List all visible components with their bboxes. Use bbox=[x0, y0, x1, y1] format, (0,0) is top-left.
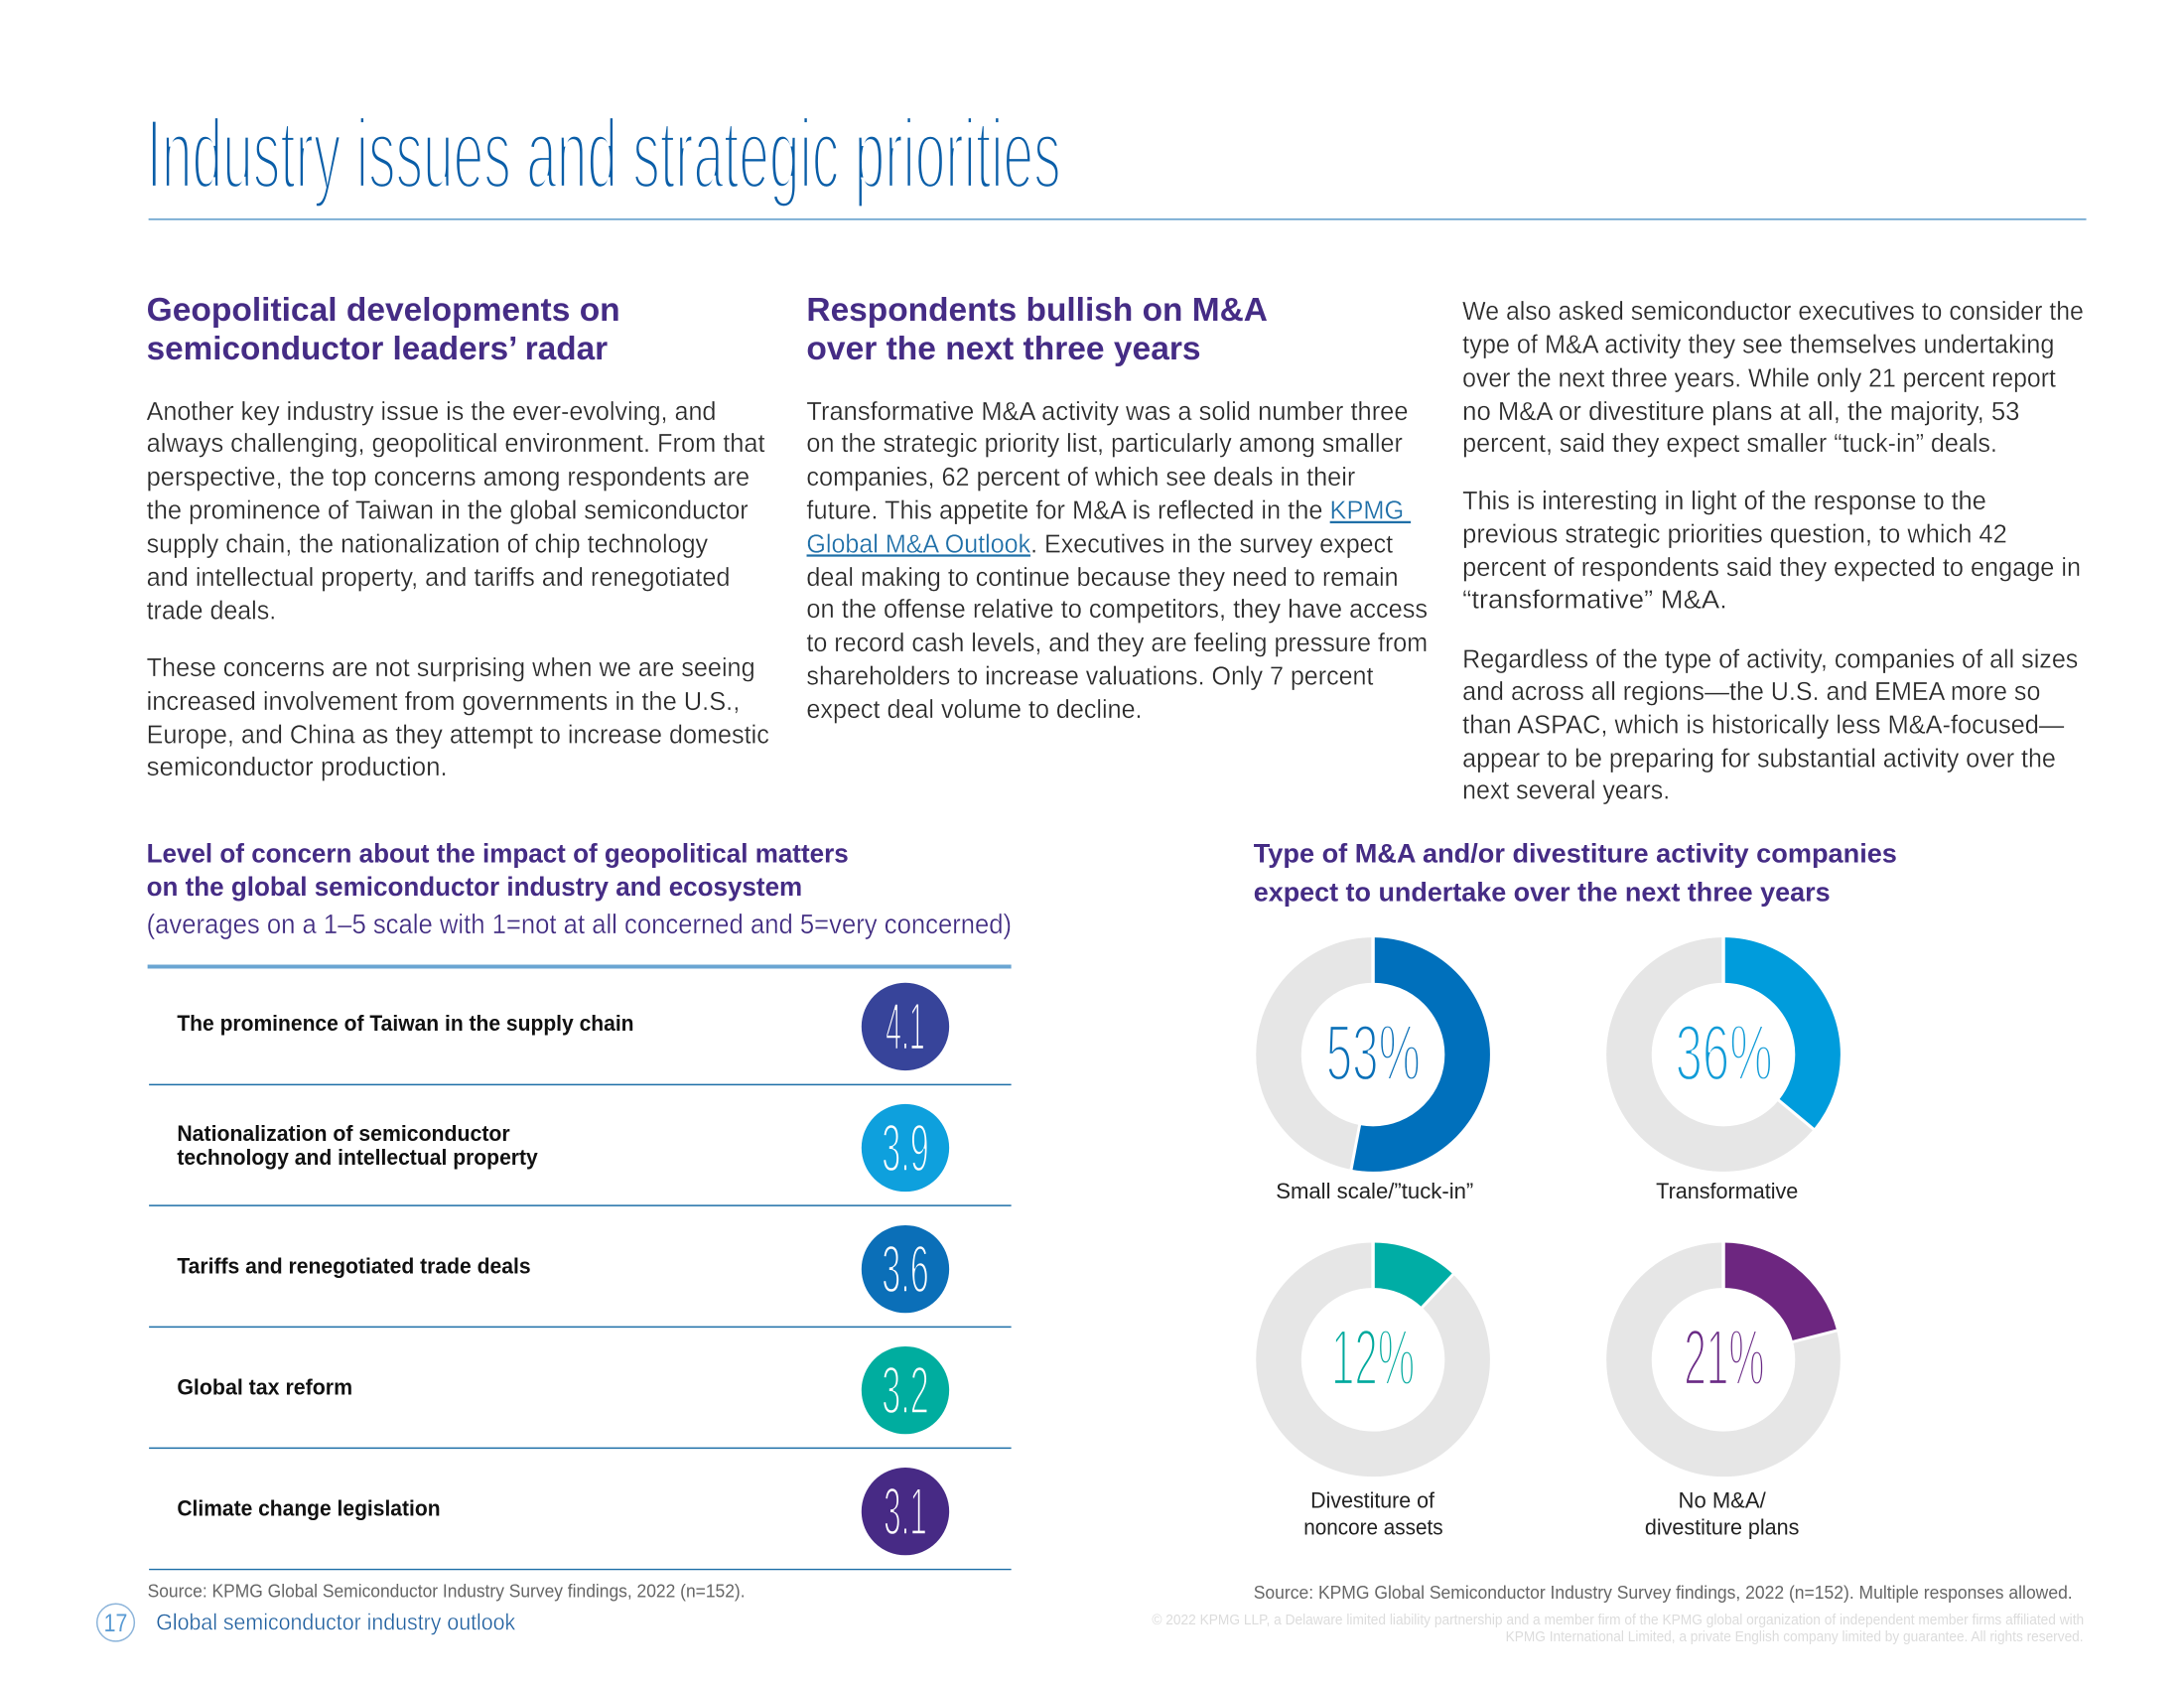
chart heading: level of concern: on the global semiconductor industry and ecosystem bbox=[147, 872, 802, 902]
text column: type of M&A activity: percent, said they expect smaller “tuck-in” deals. bbox=[1462, 430, 1997, 458]
panel: type of M&A activity bbox=[1254, 839, 2073, 1603]
heading: bullish on M&A: over the next three years bbox=[806, 331, 1201, 367]
heading: bullish on M&A bbox=[806, 292, 1268, 367]
donut: 12 percent divestiture: 12% bbox=[1331, 1312, 1415, 1401]
text column: type of M&A activity: This is interesting in light of the response to the bbox=[1462, 488, 1986, 515]
body text: geopolitical paragraphs: Europe, and China as they attempt to increase domestic bbox=[147, 721, 769, 749]
row: tariffs 3.6 bbox=[177, 1225, 949, 1313]
body text: M&A paragraph: deal making to continue because they need to remain bbox=[806, 564, 1399, 592]
body text: M&A paragraph: shareholders to increase valuations. Only 7 percent bbox=[806, 663, 1373, 691]
row: climate 3.1: Climate change legislation bbox=[177, 1495, 441, 1520]
donut: 12 percent divestiture: Divestiture of bbox=[1310, 1488, 1435, 1513]
donut: 53 percent small scale: 53% bbox=[1326, 1007, 1421, 1096]
source: right chart: Source: KPMG Global Semiconductor Industry Survey findings, 2022 (n=152). Multiple responses allowed. bbox=[1254, 1582, 2073, 1603]
chart heading: level of concern bbox=[147, 839, 1012, 939]
body text: geopolitical paragraphs: semiconductor production. bbox=[147, 754, 448, 781]
chart heading: level of concern: (averages on a 1–5 scale with 1=not at all concerned and 5=very concerned) bbox=[147, 909, 1012, 939]
row: nationalization 3.9: technology and intellectual property bbox=[177, 1145, 538, 1170]
body text: geopolitical paragraphs bbox=[147, 398, 769, 781]
text column: type of M&A activity: no M&A or divestiture plans at all, the majority, 53 bbox=[1462, 398, 2019, 426]
text column: type of M&A activity: “transformative” M&A. bbox=[1462, 586, 1727, 614]
source: left chart: Source: KPMG Global Semiconductor Industry Survey findings, 2022 (n=152). bbox=[148, 1580, 746, 1601]
heading: bullish on M&A: Respondents bullish on M&A bbox=[806, 292, 1268, 329]
body text: geopolitical paragraphs: Another key industry issue is the ever-evolving, and bbox=[147, 398, 716, 426]
page number: 17 bbox=[104, 1611, 127, 1637]
row: nationalization 3.9: Nationalization of semiconductor bbox=[177, 1121, 510, 1146]
chart heading: type of M&A: expect to undertake over the next three years bbox=[1254, 878, 1831, 908]
body text: M&A paragraph bbox=[806, 398, 1428, 724]
body text: M&A paragraph: on the offense relative to competitors, they have access bbox=[806, 596, 1428, 624]
body text: geopolitical paragraphs: perspective, the top concerns among respondents are bbox=[147, 464, 750, 492]
body text: M&A paragraph: Transformative M&A activity was a solid number three bbox=[806, 398, 1409, 426]
body text: geopolitical paragraphs: supply chain, the nationalization of chip technology bbox=[147, 530, 708, 558]
title: Industry issues and strategic priorities bbox=[147, 98, 1061, 209]
copyright: © 2022 KPMG LLP, a Delaware limited liability partnership and a member firm of the KPMG global organization of independent member firms affiliated with bbox=[1152, 1613, 2084, 1628]
donut: 36 percent transformative bbox=[1629, 934, 1818, 1203]
donut: 21 percent no plans: divestiture plans bbox=[1645, 1514, 1799, 1539]
heading: geopolitical developments: Geopolitical developments on bbox=[147, 292, 620, 329]
donut: 12 percent divestiture bbox=[1279, 1239, 1467, 1539]
copyright: KPMG International Limited, a private English company limited by guarantee. All rights reserved. bbox=[1506, 1629, 2084, 1645]
body text: M&A paragraph: to record cash levels, and they are feeling pressure from bbox=[806, 630, 1428, 657]
text column: type of M&A activity: previous strategic priorities question, to which 42 bbox=[1462, 520, 2007, 548]
row: tax reform 3.2 bbox=[177, 1346, 949, 1434]
chart heading: type of M&A: Type of M&A and/or divestiture activity companies bbox=[1254, 839, 1897, 869]
text column: type of M&A activity: Regardless of the type of activity, companies of all sizes bbox=[1462, 646, 2078, 674]
donut: 53 percent small scale: Small scale/”tuck-in” bbox=[1276, 1179, 1473, 1203]
row: tariffs 3.6: 3.6 bbox=[882, 1232, 929, 1307]
heading: geopolitical developments: semiconductor leaders’ radar bbox=[147, 331, 608, 367]
text column: type of M&A activity: next several years. bbox=[1462, 777, 1670, 805]
donut: 36 percent transformative: Transformative bbox=[1656, 1179, 1798, 1203]
body text: M&A paragraph: on the strategic priority list, particularly among smaller bbox=[806, 430, 1403, 458]
donut: 21 percent no plans: No M&A/ bbox=[1679, 1488, 1767, 1513]
heading: geopolitical developments bbox=[147, 292, 620, 367]
page number bbox=[97, 1604, 134, 1641]
row: nationalization 3.9: 3.9 bbox=[882, 1111, 929, 1186]
body text: geopolitical paragraphs: always challenging, geopolitical environment. From that bbox=[147, 430, 765, 458]
panel: level of concern bbox=[147, 839, 1012, 1601]
row: Taiwan 4.1: The prominence of Taiwan in the supply chain bbox=[177, 1011, 634, 1036]
donut: 21 percent no plans bbox=[1629, 1239, 1840, 1539]
body text: M&A paragraph: expect deal volume to decline. bbox=[806, 696, 1143, 724]
body text: M&A paragraph: Global M&A Outlook. Executives in the survey expect bbox=[806, 530, 1393, 558]
body text: geopolitical paragraphs: These concerns are not surprising when we are seeing bbox=[147, 654, 755, 682]
row: tariffs 3.6: Tariffs and renegotiated trade deals bbox=[177, 1253, 531, 1278]
row: nationalization 3.9 bbox=[177, 1104, 949, 1192]
footer title: Global semiconductor industry outlook bbox=[156, 1610, 516, 1635]
donut: 21 percent no plans: 21% bbox=[1684, 1312, 1764, 1401]
donut: 36 percent transformative: 36% bbox=[1676, 1007, 1773, 1096]
body text: M&A paragraph: future. This appetite for M&A is reflected in the KPMG bbox=[806, 497, 1411, 525]
text column: bullish on M&A bbox=[806, 292, 1428, 724]
text column: geopolitical developments bbox=[147, 292, 769, 781]
chart heading: type of M&A bbox=[1254, 839, 1897, 908]
body text: geopolitical paragraphs: trade deals. bbox=[147, 598, 276, 626]
body text: geopolitical paragraphs: increased involvement from governments in the U.S., bbox=[147, 688, 740, 716]
text column: type of M&A activity: than ASPAC, which is historically less M&A-focused— bbox=[1462, 712, 2065, 740]
text column: type of M&A activity: over the next three years. While only 21 percent report bbox=[1462, 364, 2056, 392]
row: tax reform 3.2: Global tax reform bbox=[177, 1374, 352, 1399]
row: Taiwan 4.1 bbox=[177, 983, 949, 1070]
text column: type of M&A activity: type of M&A activity they see themselves undertaking bbox=[1462, 332, 2054, 359]
row: climate 3.1: 3.1 bbox=[884, 1475, 927, 1549]
row: Taiwan 4.1: 4.1 bbox=[886, 990, 925, 1064]
row: climate 3.1 bbox=[177, 1468, 949, 1555]
text column: type of M&A activity bbox=[1462, 298, 2084, 805]
copyright bbox=[1152, 1613, 2084, 1645]
row: tax reform 3.2: 3.2 bbox=[882, 1353, 929, 1428]
text column: type of M&A activity: appear to be preparing for substantial activity over the bbox=[1462, 745, 2056, 773]
body text: M&A paragraph: companies, 62 percent of which see deals in their bbox=[806, 464, 1356, 492]
text column: type of M&A activity: We also asked semiconductor executives to consider the bbox=[1462, 298, 2084, 326]
body text: geopolitical paragraphs: the prominence of Taiwan in the global semiconductor bbox=[147, 497, 749, 525]
donut: 53 percent small scale bbox=[1276, 934, 1473, 1203]
body text: geopolitical paragraphs: and intellectual property, and tariffs and renegotiated bbox=[147, 564, 730, 592]
text column: type of M&A activity: percent of respondents said they expected to engage in bbox=[1462, 554, 2081, 582]
text column: type of M&A activity: and across all regions—the U.S. and EMEA more so bbox=[1462, 678, 2040, 706]
donut: 12 percent divestiture: noncore assets bbox=[1303, 1514, 1443, 1539]
chart heading: level of concern: Level of concern about the impact of geopolitical matters bbox=[147, 839, 849, 869]
